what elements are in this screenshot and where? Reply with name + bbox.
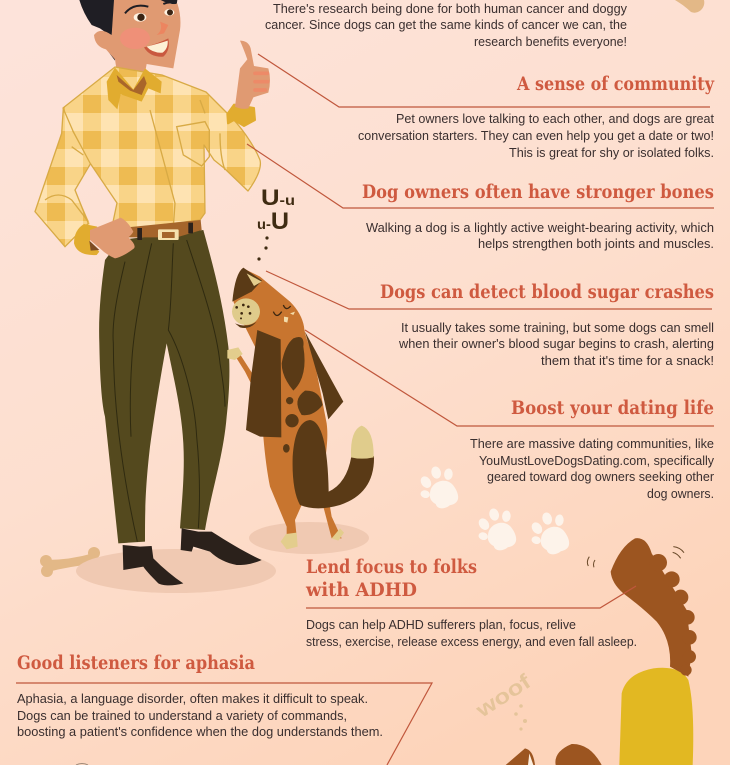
illustration: man (35, 0, 270, 585)
dog body (233, 268, 342, 538)
ears (506, 744, 602, 765)
text: community: conversation starters. They can even help you get a date or two! (358, 128, 714, 143)
text: ADHD: stress, exercise, release excess energy, and even fall asleep. (306, 634, 637, 649)
text: dating (470, 436, 715, 501)
text: dating: YouMustLoveDogsDating.com, specifically (479, 453, 714, 468)
text: ADHD (306, 617, 637, 649)
dog head (232, 268, 262, 302)
left cuff (74, 224, 99, 255)
icon: bone on floor (40, 547, 102, 577)
mouth (144, 38, 169, 57)
text: bones: Walking a dog is a lightly active weight-bearing activity, which (366, 220, 714, 235)
text: bones (366, 220, 714, 251)
text: dog snuffling marks (257, 185, 295, 261)
dog shadow (249, 522, 369, 554)
pointer line (16, 683, 432, 765)
text: blood sugar: when their owner's blood sugar begins to crash, alerting (398, 336, 714, 351)
text: ADHD: Dogs can help ADHD sufferers plan, focus, relive (306, 617, 576, 632)
text: aphasia: Aphasia, a language disorder, often makes it difficult to speak. (17, 691, 368, 706)
yellow dog body (619, 668, 693, 765)
dog face (273, 305, 291, 315)
text: woof: woof (471, 670, 536, 723)
text: dog snuffling marks: u-U (257, 208, 289, 235)
small mark at bottom edge (76, 764, 88, 765)
thumbs up hand (235, 41, 270, 109)
heading: Lend focus to folks with ADHD (305, 556, 477, 601)
pointer line (306, 586, 636, 608)
man shadow (76, 549, 276, 593)
icon: paw prints (413, 462, 573, 560)
text: blood sugar (398, 320, 714, 368)
text: community (358, 111, 714, 160)
belt (117, 220, 202, 237)
pointer line (305, 330, 714, 426)
pointer line (266, 271, 712, 309)
text: cancer research (265, 1, 627, 49)
text: dating: dog owners. (647, 486, 714, 501)
text: blood sugar: It usually takes some training, but some dogs can smell (401, 320, 714, 335)
text: aphasia (17, 691, 383, 739)
bone top right (675, 0, 704, 13)
text: bones: helps strengthen both joints and muscles. (478, 236, 714, 251)
hair (79, 0, 177, 61)
pointer line (247, 144, 714, 208)
head and shirt, traced in 3x coordinates (35, 0, 270, 258)
text: aphasia: boosting a patient's confidence when the dog understands them. (17, 724, 383, 739)
text: community: This is great for shy or isolated folks. (509, 145, 714, 160)
text: cancer research: There's research being done for both human cancer and doggy (273, 1, 627, 16)
pointer line (258, 54, 710, 107)
text: community: Pet owners love talking to each other, and dogs are great (396, 111, 714, 126)
hand on hip (90, 218, 135, 258)
text: blood sugar: them that it's time for a snack! (541, 353, 714, 368)
text: cancer research: cancer. Since dogs can get the same kinds of cancer we can, the (265, 17, 627, 32)
right cuff (227, 105, 255, 126)
illustration: dog on bottom right (506, 538, 697, 765)
motion marks (587, 547, 684, 567)
collar (107, 68, 162, 109)
dog tail (293, 420, 374, 508)
heading: Lend focus to folks with ADHD: with ADHD (305, 579, 417, 601)
wagging tail (611, 538, 697, 677)
text: cancer research: research benefits everyone! (474, 34, 627, 49)
text: dating: There are massive dating communities, like (470, 436, 714, 451)
left arm (35, 108, 90, 247)
face (94, 0, 180, 95)
dog arm (237, 352, 253, 387)
pants and shoes (99, 230, 262, 585)
illustration: standing dog (227, 268, 374, 549)
dots under woof (514, 704, 527, 731)
heading: Lend focus to folks with ADHD: Lend focus to folks (306, 556, 477, 578)
eyes and brow (125, 2, 173, 13)
text: aphasia: Dogs can be trained to understand a variety of commands, (17, 708, 347, 723)
text: dating: geared toward dog owners seeking other (487, 469, 715, 484)
text: dog snuffling marks: U-u (261, 185, 295, 210)
heading: Good listeners for aphasia: Good listeners for aphasia (17, 652, 255, 674)
dog ears and markings (246, 330, 343, 437)
torso (63, 67, 260, 230)
dog paws (281, 528, 344, 549)
